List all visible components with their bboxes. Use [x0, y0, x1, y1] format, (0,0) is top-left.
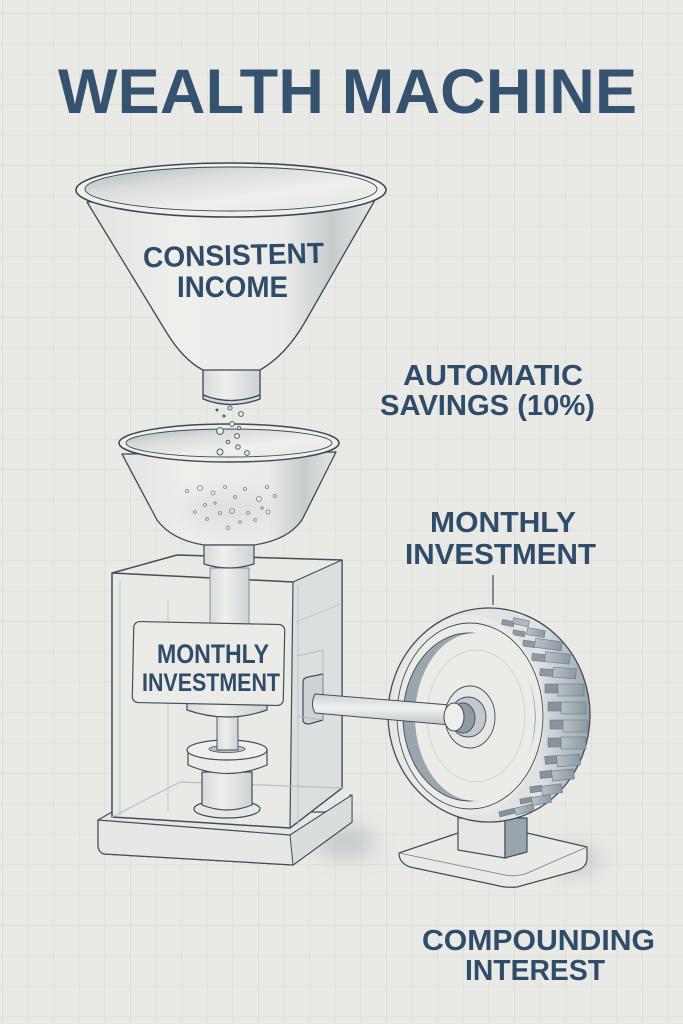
press column [210, 568, 249, 625]
label: automatic savings: SAVINGS (10%) [380, 390, 595, 422]
label: compounding interest: INTEREST [465, 955, 605, 987]
tread blocks [499, 618, 588, 817]
label: automatic savings: AUTOMATIC [403, 360, 583, 392]
label: monthly investment with leader line: INVESTMENT [405, 539, 596, 571]
panel: monthly investment sign: MONTHLY [157, 639, 269, 669]
funnel label: CONSISTENT [143, 238, 325, 274]
base [98, 795, 352, 865]
wheel face [394, 615, 544, 815]
upper funnel: consistent income [76, 163, 386, 404]
machine box shadow [315, 826, 375, 858]
glass box [112, 555, 342, 828]
settled particles [183, 485, 277, 530]
label: monthly investment with leader line [405, 507, 596, 605]
drive plate [303, 674, 323, 724]
press stem and disc [187, 700, 267, 818]
label: compounding interest: COMPOUNDING [422, 925, 655, 957]
hub [444, 686, 495, 748]
panel: monthly investment sign: INVESTMENT [142, 669, 280, 697]
label: monthly investment with leader line: MONTHLY [430, 507, 576, 539]
flywheel shadow [549, 846, 601, 874]
drive rod [312, 694, 450, 725]
machine box with base and press [98, 545, 352, 865]
flywheel [312, 608, 590, 822]
title: WEALTH MACHINE [58, 57, 637, 127]
label: compounding interest [422, 925, 655, 987]
funnel label: INCOME [177, 271, 288, 304]
panel: monthly investment sign [132, 621, 285, 706]
flywheel stand base [399, 818, 587, 887]
funnel label [143, 238, 325, 304]
lower funnel with particles [119, 424, 339, 545]
falling particles [216, 406, 249, 455]
label: automatic savings [380, 360, 595, 422]
